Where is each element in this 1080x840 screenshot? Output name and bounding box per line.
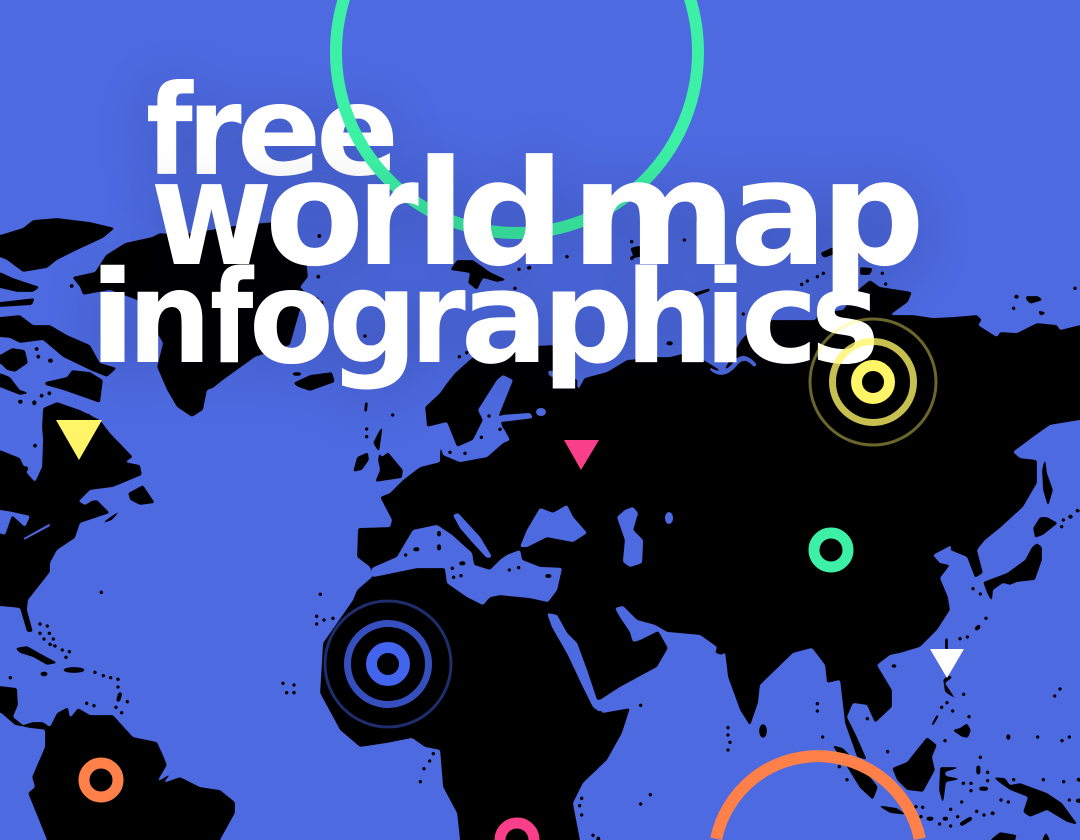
small island dots: Atlantic and Caribbean (10, 592, 294, 713)
title word: infographics: a (460, 244, 549, 393)
landmass: South America (28, 707, 235, 840)
title word: infographics: n (128, 244, 212, 393)
inland water: North America (0, 492, 110, 540)
title word: infographics: f (210, 244, 254, 393)
title word: free: f (146, 59, 194, 204)
title word: world: o (265, 129, 364, 299)
marker: yellow target (810, 319, 936, 445)
marker: orange ring (84, 763, 118, 797)
landmass: Arctic Canada (0, 218, 117, 403)
title word: infographics: o (249, 244, 334, 393)
title words: world map infographics (89, 129, 925, 393)
title word: map: a (730, 129, 827, 299)
title word: infographics: r (410, 244, 466, 393)
title word: infographics: i (704, 244, 747, 393)
marker: white triangle (930, 649, 964, 678)
title word: world: d (457, 129, 565, 299)
small island dots: north (20, 236, 322, 511)
title word: map: m (570, 129, 738, 299)
title word: infographics: i (89, 244, 136, 393)
landmass: Greenland (72, 222, 310, 417)
decorative ring: orange (716, 756, 920, 839)
marker: pink triangle (564, 440, 599, 470)
landmass: North America (0, 402, 155, 730)
small island dots: Africa and Mediterranean (317, 533, 650, 838)
title word: infographics: g (328, 244, 418, 393)
title word: infographics: p (542, 244, 634, 393)
title word: infographics: c (740, 244, 819, 393)
title word: free: e (237, 59, 321, 204)
landmass: East Asia islands (820, 247, 1058, 602)
title word: map: p (820, 129, 925, 299)
landmass: Europe islands (292, 246, 710, 482)
inland seas (372, 356, 757, 712)
title word: free: r (188, 59, 242, 204)
marker: blue target (325, 601, 451, 727)
title word: free (146, 59, 399, 204)
landmass: Southeast Asia and Oceania (759, 638, 1078, 840)
title word: world: w (150, 129, 273, 299)
title word: world: l (415, 129, 466, 299)
marker: yellow triangle (56, 420, 102, 460)
small island dots: Europe (365, 240, 684, 453)
title word: infographics: s (811, 244, 880, 393)
decorative ring: green (336, 0, 698, 233)
landmass: Eurasia and Africa (320, 280, 1080, 840)
title word: free: e (316, 59, 399, 204)
title word: infographics: h (625, 244, 713, 393)
small island dots: Asia north (743, 273, 1077, 527)
marker: green ring (814, 533, 848, 567)
title word: world: r (357, 129, 419, 299)
small island dots: Asia south and Pacific (728, 589, 1079, 826)
marker: pink ring (500, 823, 534, 840)
